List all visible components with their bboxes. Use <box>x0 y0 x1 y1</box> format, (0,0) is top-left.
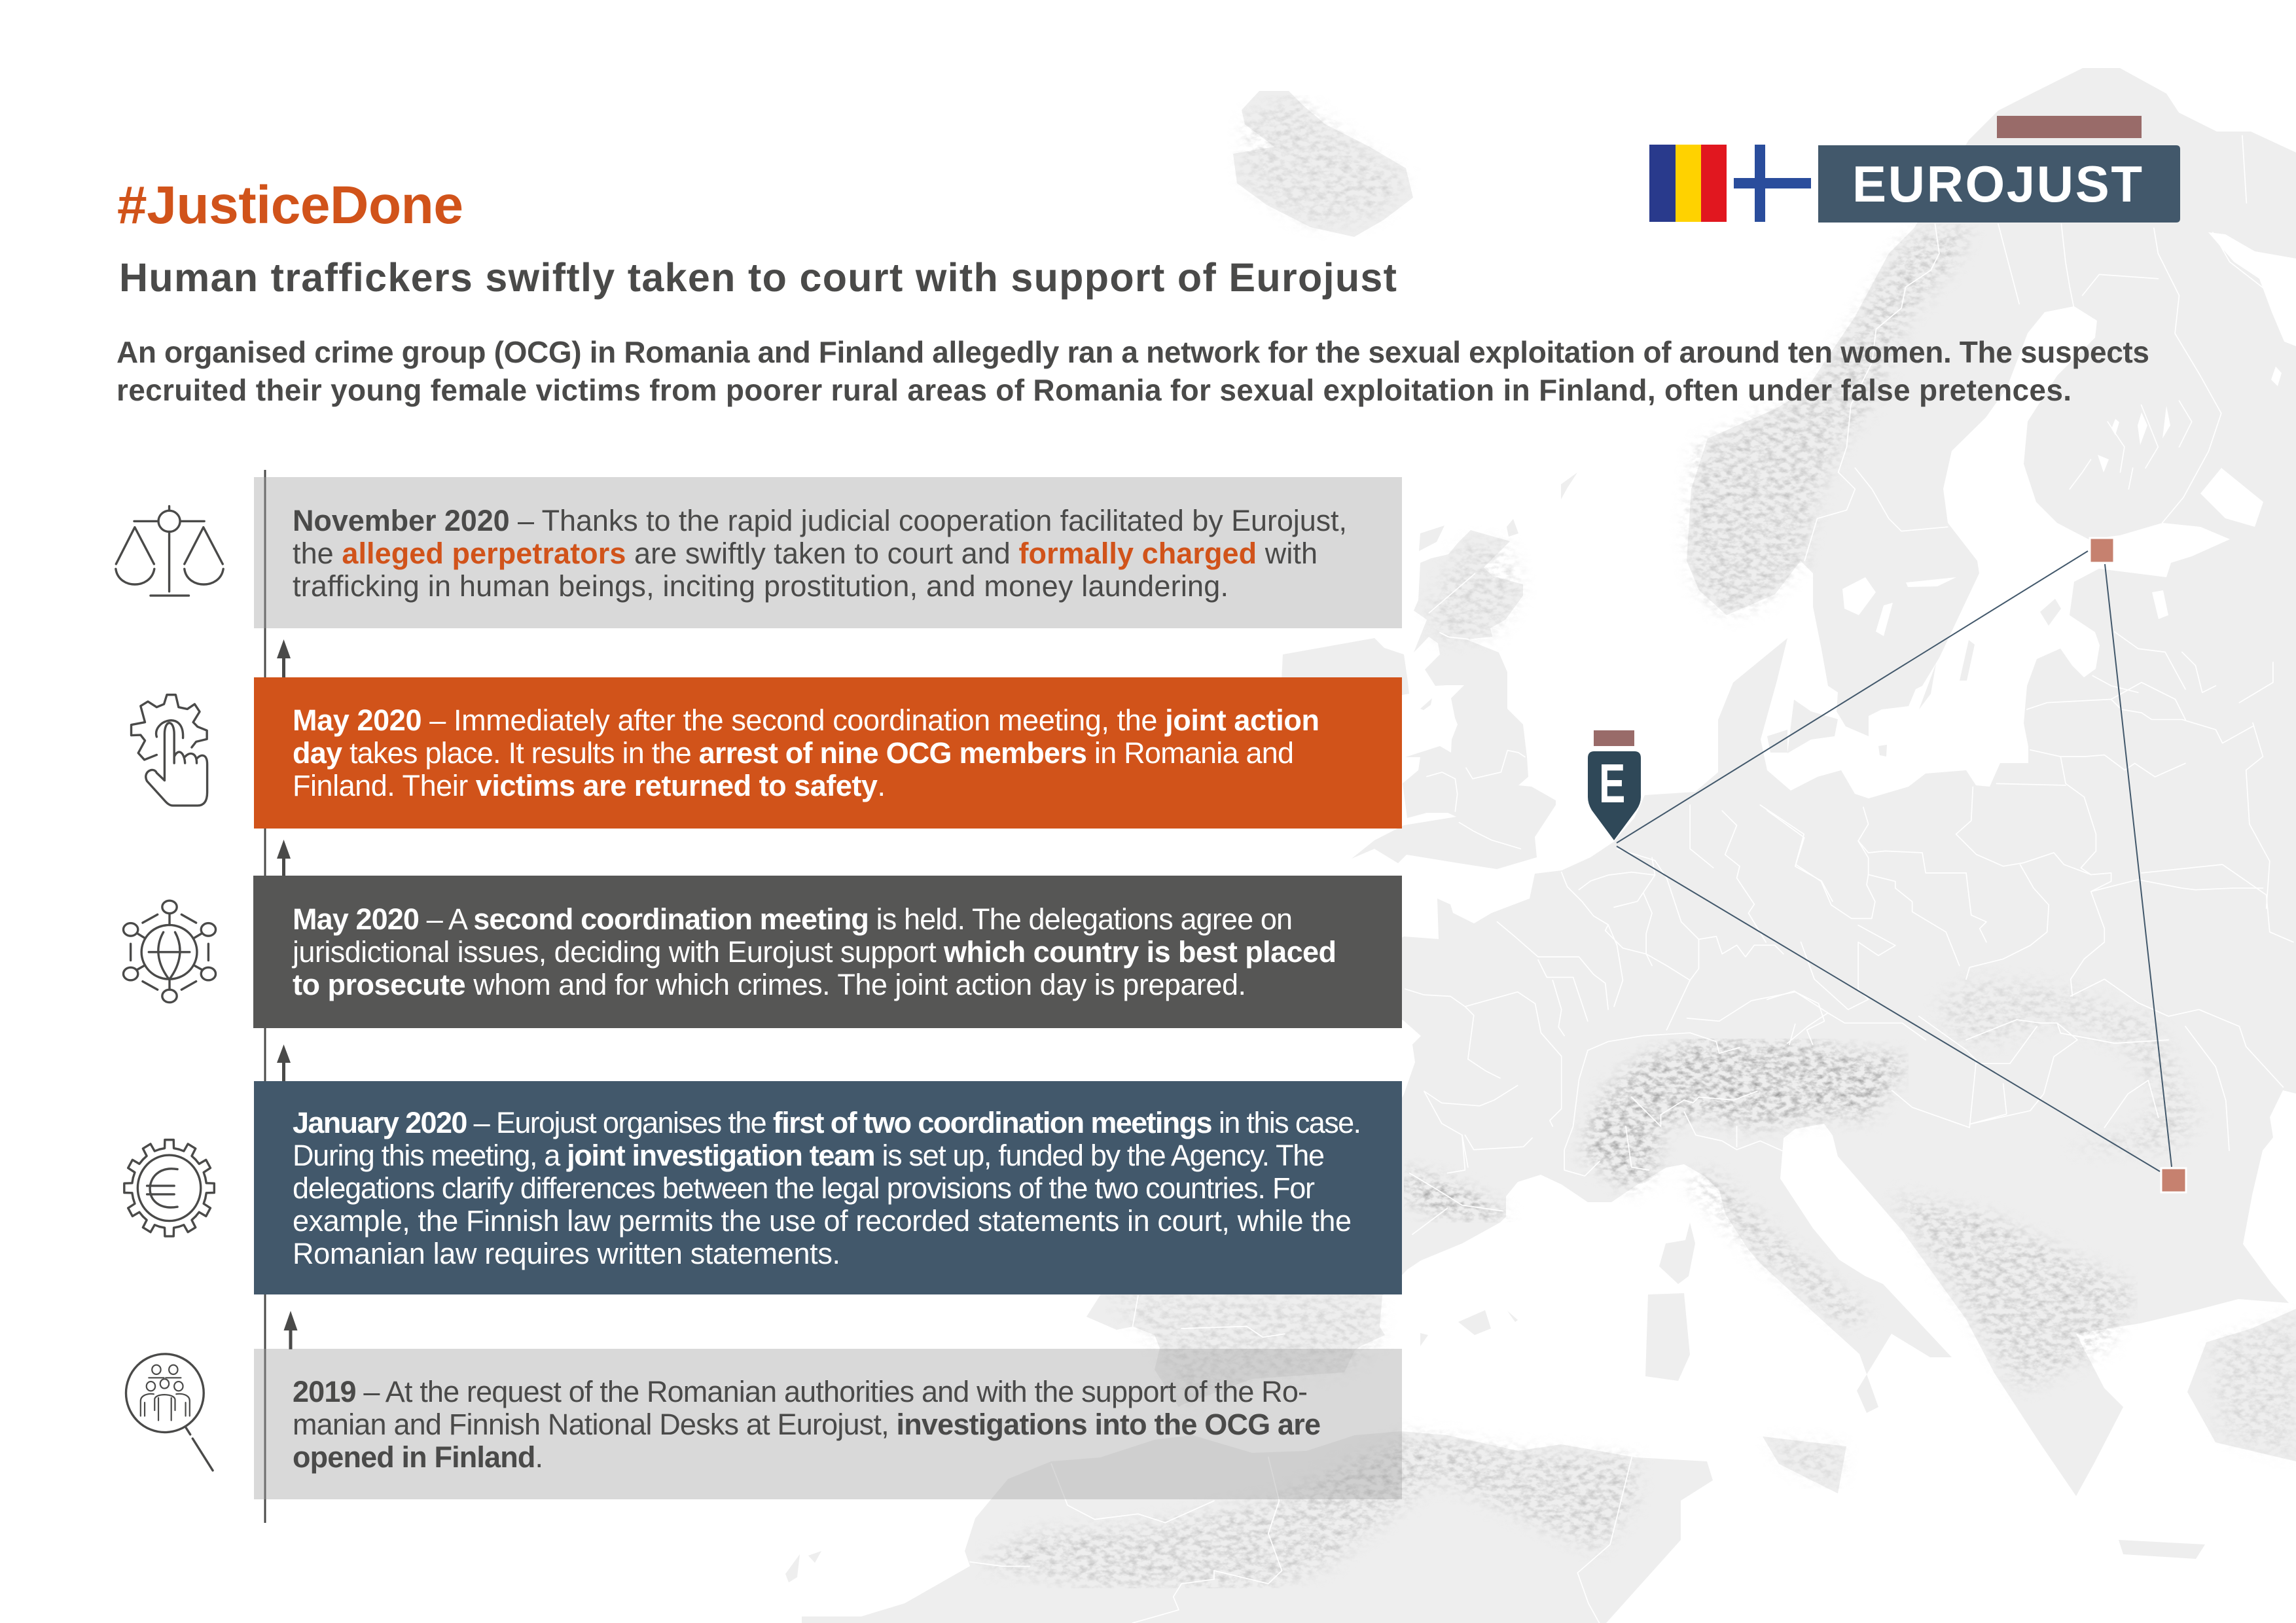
panel: November 2020 <box>254 477 1402 628</box>
connection lines <box>1617 551 2172 1171</box>
map: Saaremaa <box>2040 599 2061 626</box>
map: Europe background <box>785 68 2296 1623</box>
map: borders and rivers, central and eastern Europe <box>1767 632 2293 1150</box>
map: Sardinia <box>1645 1293 1690 1381</box>
panel: November 2020: the alleged perpetrators are swiftly taken to court and formally charged with <box>293 537 1318 570</box>
map: Great Britain <box>1352 530 1556 869</box>
panel: May 2020 second coordination meeting <box>253 876 1402 1028</box>
marker: Eurojust pin <box>1588 730 1641 840</box>
map: Shetland <box>1561 473 1577 499</box>
map: Africa <box>802 1431 1713 1623</box>
logo: Eurojust <box>1818 116 2180 223</box>
title: #JusticeDone <box>117 175 463 235</box>
map: Crete <box>2119 1540 2205 1559</box>
icon: euro gear <box>124 1140 214 1236</box>
marker: Eurojust pin: E <box>1599 753 1625 814</box>
map: Corsica <box>1659 1222 1695 1284</box>
panel: May 2020 second coordination meeting: jurisdictional issues, deciding with Eurojust support which country is best placed <box>291 935 1336 969</box>
intro text <box>117 335 2149 407</box>
panel: 2019 <box>254 1349 1402 1499</box>
arrow 2 <box>277 840 291 876</box>
map: Denmark islands <box>1787 700 1838 753</box>
icon: Finnish cross <box>1734 145 1811 222</box>
arrow 4 <box>284 1311 297 1349</box>
map: Turkey <box>2187 1309 2296 1461</box>
panel: January 2020: Romanian law requires written statements. <box>293 1237 840 1270</box>
panel: May 2020 second coordination meeting: to prosecute whom and for which crimes. The joint action day is prepared. <box>293 968 1246 1001</box>
map: Iceland <box>1233 91 1413 237</box>
panel: 2019: opened in Finland. <box>293 1440 543 1474</box>
icon: Romanian flag <box>1649 145 1727 222</box>
map: seas and lakes <box>1842 232 2296 636</box>
panel: January 2020: January 2020 – Eurojust organises the first of two coordination meetings in this case. <box>293 1106 1361 1139</box>
panel: May 2020 joint action day: May 2020 – Immediately after the second coordination meeting, the joint action <box>293 704 1319 737</box>
map: Balearics <box>1458 1310 1491 1335</box>
map: borders and rivers, Iberia and North Africa <box>970 1296 1632 1623</box>
map: Canary islands <box>785 1554 800 1582</box>
arrow 3 <box>277 1044 291 1082</box>
icon: magnifier with people <box>126 1354 213 1471</box>
panel: January 2020: During this meeting, a joint investigation team is set up, funded by the Agency. The <box>293 1139 1325 1172</box>
logo: Eurojust: EUROJUST <box>1852 155 2142 213</box>
panel: November 2020: trafficking in human beings, inciting prostitution, and money laundering. <box>293 569 1229 603</box>
map: borders and rivers, western Europe <box>1405 805 1833 1234</box>
panel: May 2020 second coordination meeting: May 2020 – A second coordination meeting is held. The delegations agree on <box>293 902 1293 936</box>
map: relief shading <box>1404 1039 1909 1222</box>
map: Isle of Man <box>1420 698 1432 710</box>
panel: November 2020: November 2020 – Thanks to the rapid judicial cooperation facilitated by Eurojust, <box>293 504 1347 537</box>
icon: scales of justice <box>116 506 223 596</box>
map: Orkney <box>1507 519 1518 537</box>
map: borders and rivers, Britain <box>1427 574 1525 812</box>
subtitle: Human traffickers swiftly taken to court with support of Eurojust <box>119 255 1397 300</box>
icon: globe network <box>123 901 216 1003</box>
map: Gotland and Oland <box>1960 640 1975 681</box>
map: borders and rivers, Scandinavia <box>1804 135 2267 561</box>
marker: Helsinki square <box>2090 538 2114 563</box>
intro text: recruited their young female victims from poorer rural areas of Romania for sexual exploitation in Finland, often under false pretences. <box>117 373 2072 407</box>
timeline vertical line <box>264 470 266 1523</box>
panel: January 2020: example, the Finnish law permits the use of recorded statements in court, while the <box>293 1204 1352 1238</box>
map: Hebrides <box>1419 526 1444 551</box>
marker: Bucharest square <box>2161 1168 2186 1192</box>
icon: gear with pointing hand <box>132 695 207 806</box>
map: Sicily <box>1763 1436 1846 1493</box>
panel: May 2020 joint action day <box>254 677 1402 829</box>
arrow 1 <box>277 639 291 678</box>
panel: 2019: manian and Finnish National Desks at Eurojust, investigations into the OCG are <box>293 1408 1321 1441</box>
map: continental Europe and Scandinavia <box>1086 68 2296 1496</box>
panel: May 2020 joint action day: day takes place. It results in the arrest of nine OCG members in Romania and <box>293 736 1294 770</box>
panel: January 2020 <box>254 1081 1402 1294</box>
intro text: An organised crime group (OCG) in Romania and Finland allegedly ran a network for the sexual exploitation of around ten women. The suspects <box>117 335 2149 369</box>
panel: May 2020 joint action day: Finland. Their victims are returned to safety. <box>293 769 886 802</box>
panel: January 2020: delegations clarify differences between the legal provisions of the two countries. For <box>293 1171 1315 1205</box>
map: Ireland <box>1276 638 1409 818</box>
panel: 2019: 2019 – At the request of the Romanian authorities and with the support of the Ro- <box>293 1375 1308 1408</box>
